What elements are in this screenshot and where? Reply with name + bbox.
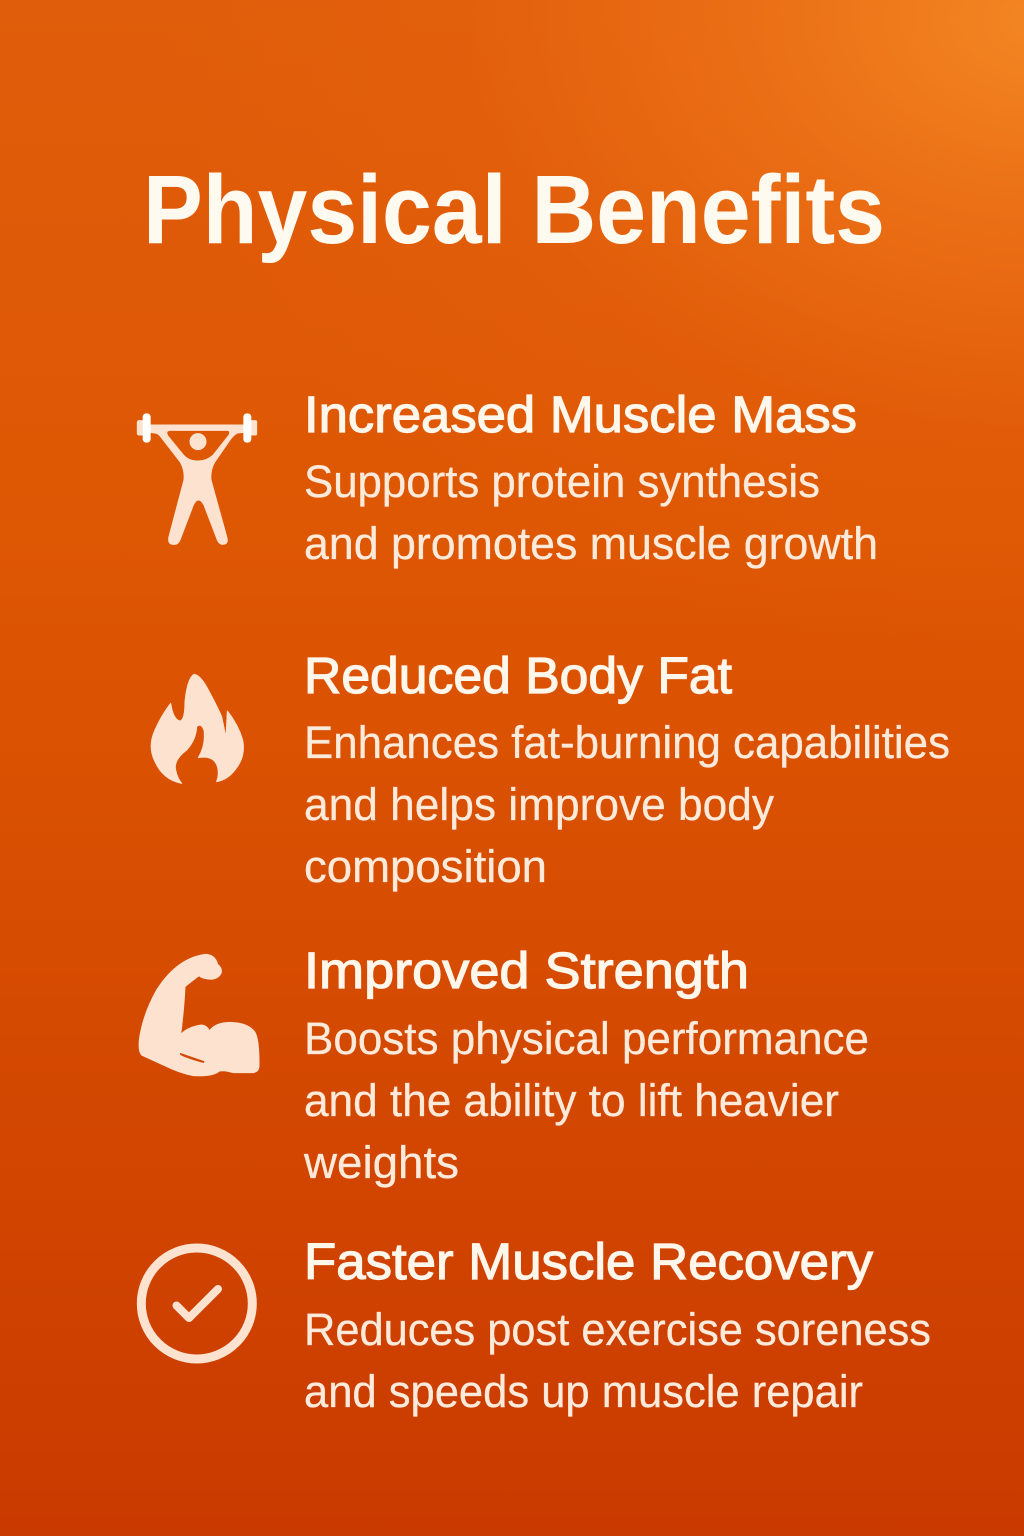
description: Supports protein synthesis xyxy=(304,456,820,507)
description: and the ability to lift heavier xyxy=(304,1075,839,1126)
icon: check circle xyxy=(141,1248,252,1359)
heading: Reduced Body Fat xyxy=(304,647,732,704)
heading: Improved Strength xyxy=(304,942,749,999)
description: Reduces post exercise soreness xyxy=(304,1304,931,1355)
description: Enhances fat-burning capabilities xyxy=(304,717,950,768)
description xyxy=(304,717,950,892)
description: and speeds up muscle repair xyxy=(304,1366,863,1417)
icon: flexed arm xyxy=(139,954,259,1076)
icon: weightlifter xyxy=(137,413,257,544)
description xyxy=(304,456,878,569)
panel: reduced body fat xyxy=(151,647,950,892)
panel: increased muscle mass xyxy=(137,386,878,569)
title: Physical Benefits xyxy=(143,155,885,264)
description xyxy=(303,1013,869,1188)
description: composition xyxy=(304,841,547,892)
description: and helps improve body xyxy=(304,779,774,830)
description: weights xyxy=(303,1137,459,1188)
panel: improved strength xyxy=(139,942,869,1188)
description: Boosts physical performance xyxy=(304,1013,869,1064)
icon: flame xyxy=(151,674,243,783)
heading: Increased Muscle Mass xyxy=(304,386,857,443)
heading: Faster Muscle Recovery xyxy=(304,1233,874,1290)
description xyxy=(304,1304,931,1417)
description: and promotes muscle growth xyxy=(304,518,878,569)
panel: faster muscle recovery xyxy=(141,1233,931,1417)
